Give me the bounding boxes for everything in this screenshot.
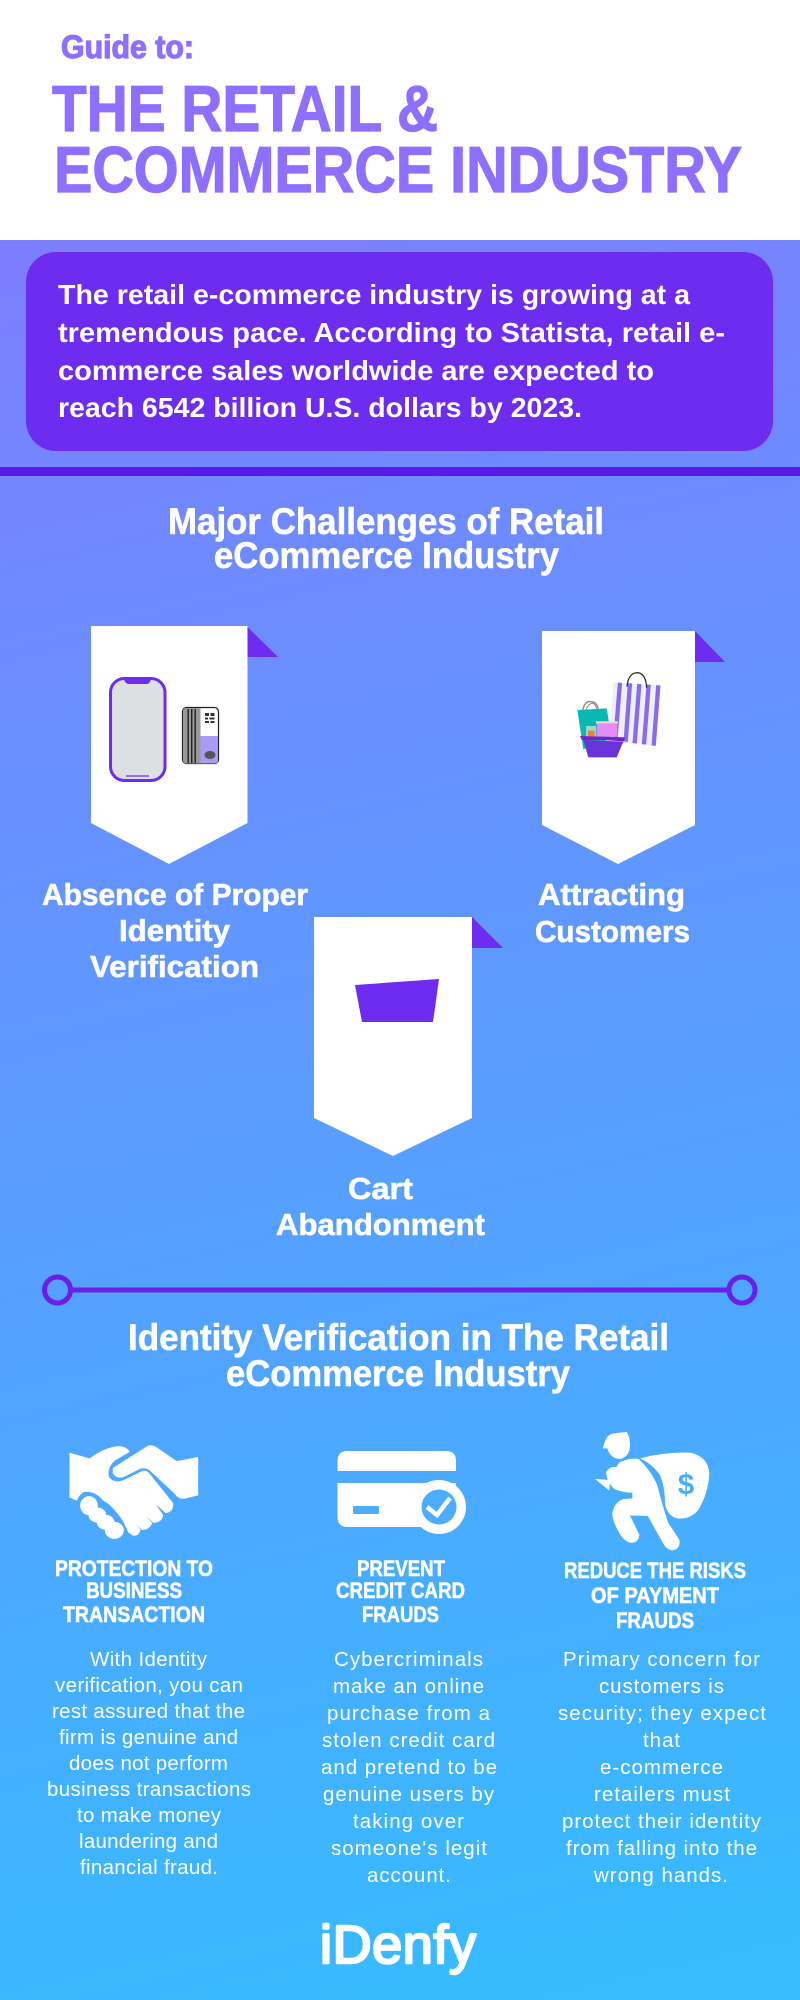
body text: make an online bbox=[333, 1675, 484, 1698]
body text: purchase from a bbox=[327, 1702, 491, 1725]
body text: laundering and bbox=[79, 1830, 218, 1853]
heading: TRANSACTION bbox=[63, 1602, 205, 1627]
body text bbox=[558, 1648, 766, 1887]
heading: FRAUDS bbox=[616, 1608, 694, 1633]
body text: security; they expect bbox=[558, 1702, 766, 1725]
label: Abandonment bbox=[276, 1207, 485, 1242]
icon: thief with money bag: $ bbox=[678, 1469, 694, 1502]
panel: intro callout: reach 6542 billion U.S. dollars by 2023. bbox=[58, 392, 582, 423]
panel: intro callout bbox=[26, 252, 773, 451]
panel: intro callout: The retail e-commerce industry is growing at a bbox=[58, 279, 690, 310]
body text: taking over bbox=[353, 1810, 464, 1833]
label bbox=[42, 877, 308, 984]
heading: identity verification: Identity Verification in The Retail bbox=[128, 1317, 669, 1358]
body text: to make money bbox=[77, 1804, 222, 1827]
body text: someone's legit bbox=[331, 1837, 487, 1860]
heading bbox=[55, 1556, 213, 1627]
heading: OF PAYMENT bbox=[591, 1583, 720, 1608]
body text: protect their identity bbox=[562, 1810, 762, 1833]
banner shape bbox=[91, 626, 278, 864]
heading: major challenges bbox=[168, 501, 604, 576]
label: Identity bbox=[119, 913, 231, 948]
body text: business transactions bbox=[47, 1778, 251, 1801]
body text: firm is genuine and bbox=[59, 1726, 238, 1749]
body text: Primary concern for bbox=[563, 1648, 760, 1671]
body text: Cybercriminals bbox=[334, 1648, 483, 1671]
body text: With Identity bbox=[90, 1648, 208, 1671]
heading: identity verification bbox=[128, 1317, 669, 1394]
body text: that bbox=[643, 1729, 680, 1752]
body text bbox=[47, 1648, 251, 1879]
panel: attracting customers challenge bbox=[535, 631, 725, 949]
panel: prevent credit card frauds bbox=[321, 1451, 497, 1887]
icon: phone and id card bbox=[110, 677, 218, 780]
body text: retailers must bbox=[594, 1783, 730, 1806]
label bbox=[276, 1171, 485, 1242]
body text: from falling into the bbox=[566, 1837, 757, 1860]
panel: intro callout: tremendous pace. According to Statista, retail e- bbox=[58, 317, 725, 348]
panel: reduce the risks of payment frauds bbox=[558, 1432, 766, 1887]
heading: CREDIT CARD bbox=[336, 1578, 465, 1603]
heading: REDUCE THE RISKS bbox=[564, 1558, 746, 1583]
label: Cart bbox=[348, 1171, 413, 1206]
logo: iDenfy: iDenfy bbox=[320, 1915, 476, 1975]
panel: cart abandonment challenge bbox=[276, 917, 503, 1242]
label: Attracting bbox=[538, 877, 685, 912]
kicker: guide to: Guide to: bbox=[61, 29, 194, 65]
header title block bbox=[52, 29, 742, 206]
body text: stolen credit card bbox=[322, 1729, 495, 1752]
icon: thief with money bag bbox=[595, 1432, 709, 1549]
body text: verification, you can bbox=[55, 1674, 243, 1697]
icon: handshake bbox=[70, 1446, 198, 1538]
label bbox=[535, 877, 690, 949]
body text: wrong hands. bbox=[593, 1864, 728, 1887]
title: THE RETAIL & bbox=[52, 72, 438, 145]
heading bbox=[564, 1558, 746, 1633]
body text: genuine users by bbox=[323, 1783, 495, 1806]
heading: FRAUDS bbox=[362, 1602, 439, 1627]
heading: major challenges: Major Challenges of Retail bbox=[168, 501, 604, 542]
banner shape bbox=[314, 917, 503, 1156]
body text: rest assured that the bbox=[52, 1700, 245, 1723]
label: Customers bbox=[535, 914, 690, 949]
body text bbox=[321, 1648, 497, 1887]
body text: does not perform bbox=[69, 1752, 228, 1775]
heading: BUSINESS bbox=[86, 1578, 182, 1603]
body text: financial fraud. bbox=[80, 1856, 218, 1879]
body text: and pretend to be bbox=[321, 1756, 497, 1779]
icon: credit card with check bbox=[338, 1451, 466, 1534]
icon: cart basket bbox=[355, 979, 439, 1022]
panel: identity verification challenge bbox=[42, 626, 308, 984]
label: Verification bbox=[90, 949, 259, 984]
heading: PREVENT bbox=[357, 1556, 445, 1581]
body text: customers is bbox=[599, 1675, 724, 1698]
body text: e-commerce bbox=[600, 1756, 723, 1779]
icon: shopping bags and basket bbox=[577, 673, 660, 757]
panel: protection to business transaction bbox=[47, 1446, 251, 1879]
body text: account. bbox=[367, 1864, 451, 1887]
heading: PROTECTION TO bbox=[55, 1556, 213, 1581]
heading: major challenges: eCommerce Industry bbox=[214, 535, 559, 576]
label: Absence of Proper bbox=[42, 877, 308, 912]
banner shape bbox=[542, 631, 725, 864]
heading bbox=[336, 1556, 465, 1627]
title bbox=[52, 72, 742, 206]
heading: identity verification: eCommerce Industry bbox=[226, 1353, 570, 1394]
panel: intro callout: commerce sales worldwide are expected to bbox=[58, 355, 654, 386]
